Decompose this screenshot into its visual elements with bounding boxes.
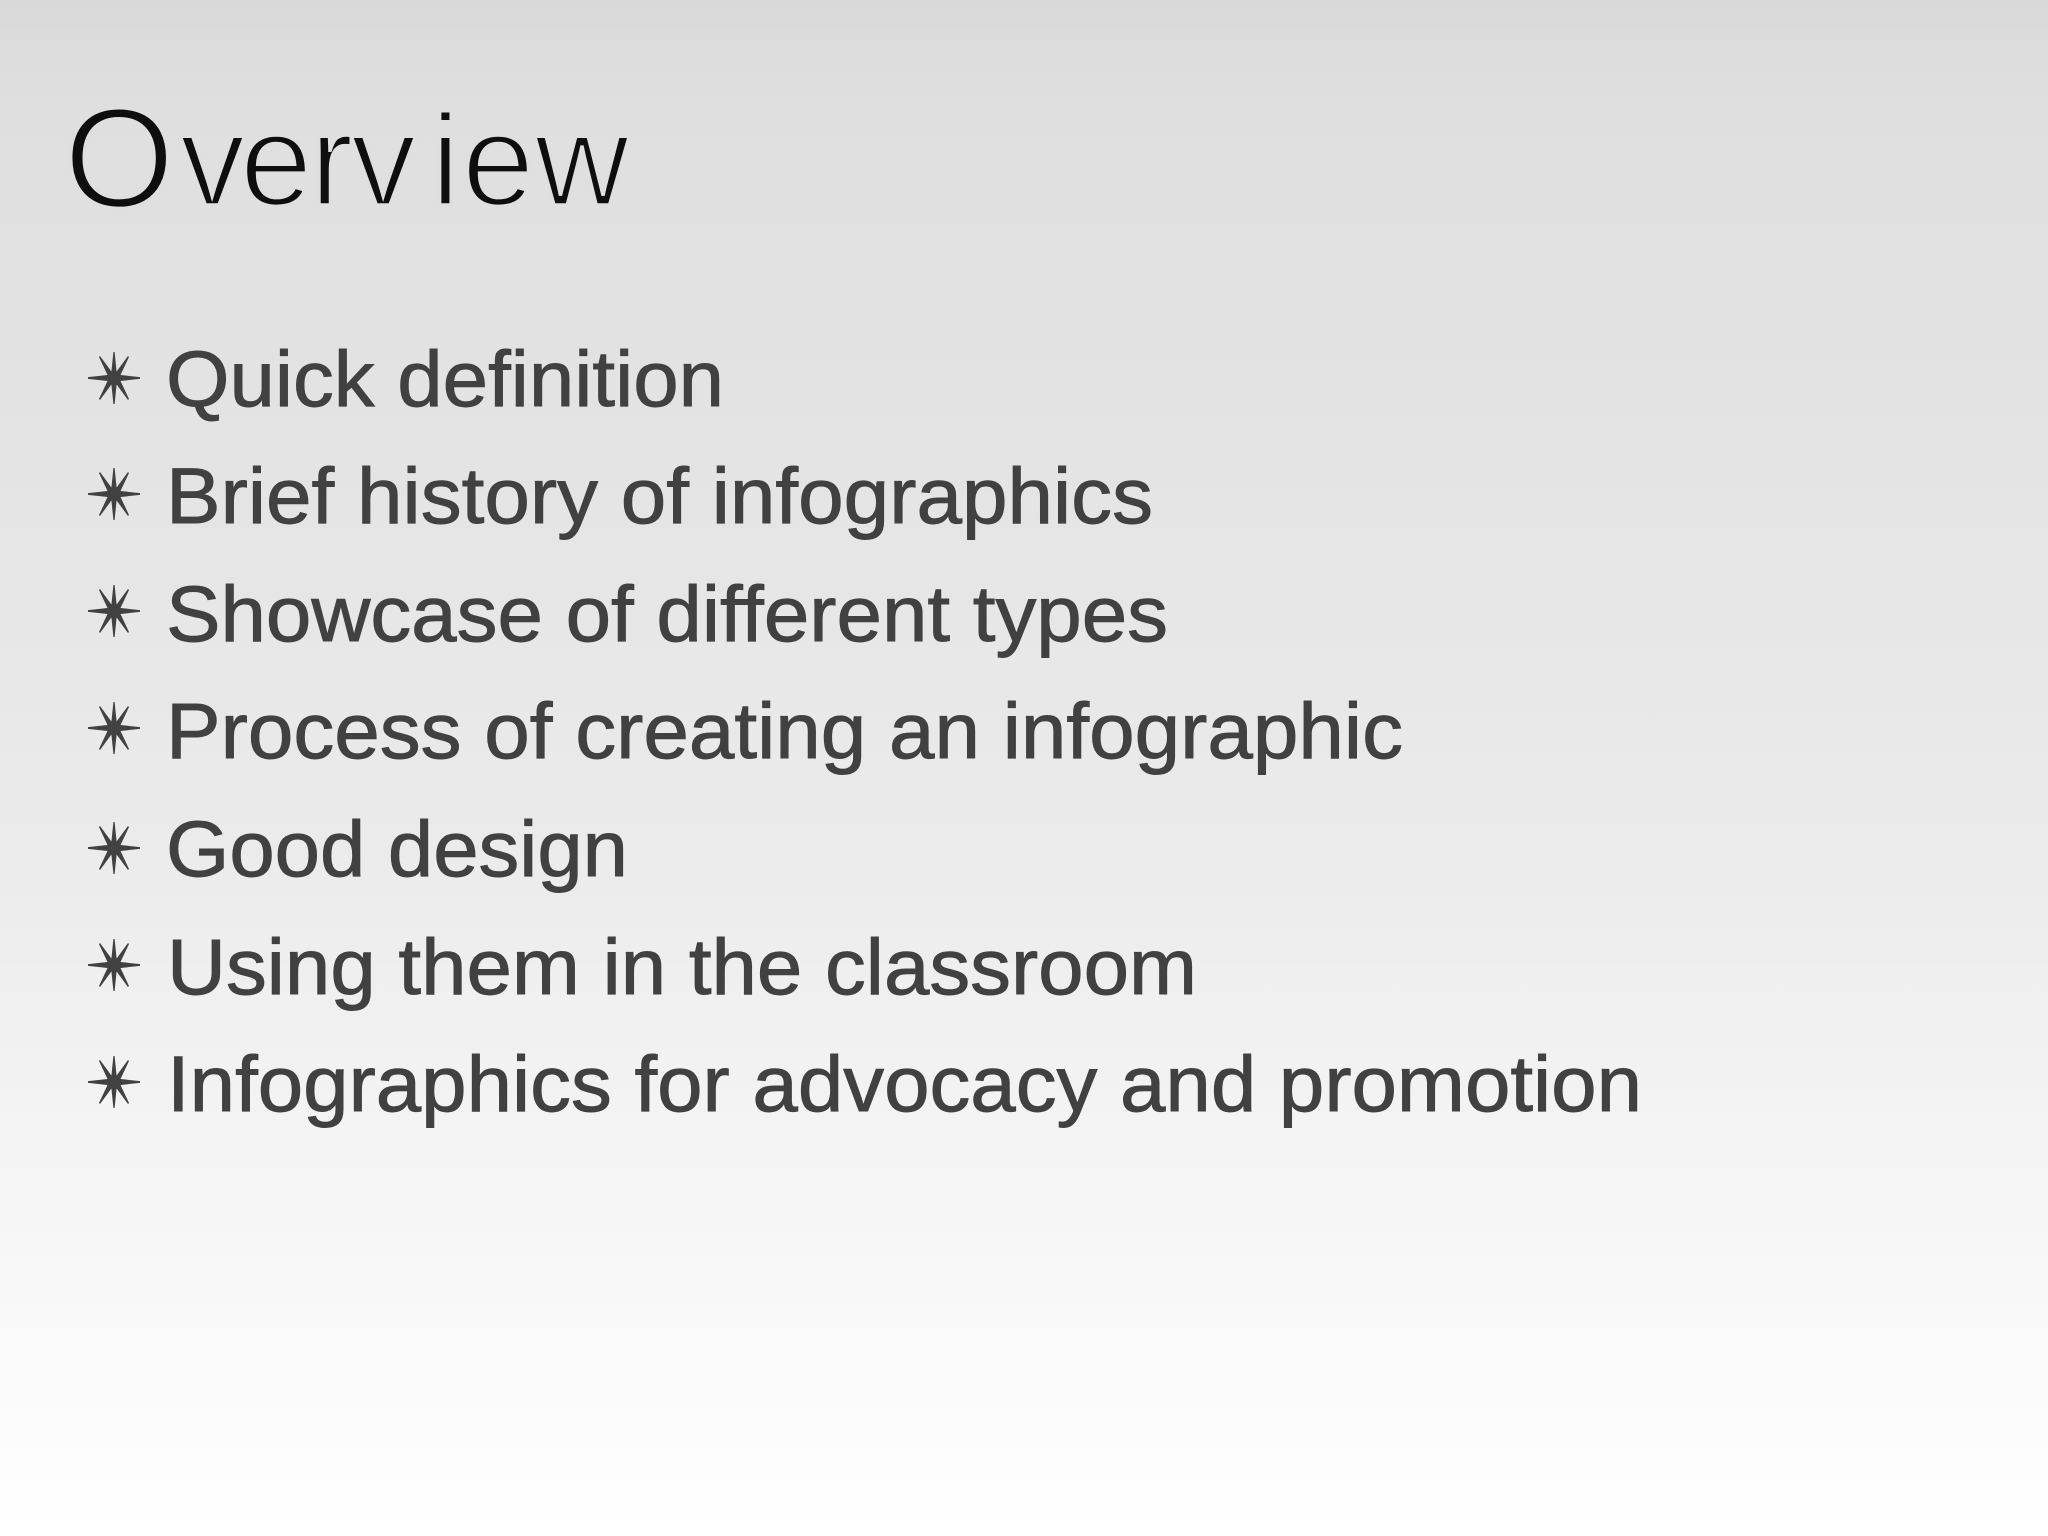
bullet: Process of creating an infographic: Process of creating an infographic [166,686,1403,775]
bullet: Using them in the classroom: Using them in the classroom [167,922,1197,1011]
bullet: Good design: Good design [166,804,628,893]
bullet: Quick definition: Quick definition [166,334,724,423]
bullet: Brief history of infographics: Brief history of infographics [166,451,1153,540]
bullet list [88,334,1642,1128]
title: verview [180,87,630,233]
bullet: Infographics for advocacy and promotion: Infographics for advocacy and promotion [167,1039,1642,1128]
title: O [64,79,174,238]
bullet: Showcase of different types: Showcase of different types [166,569,1168,658]
